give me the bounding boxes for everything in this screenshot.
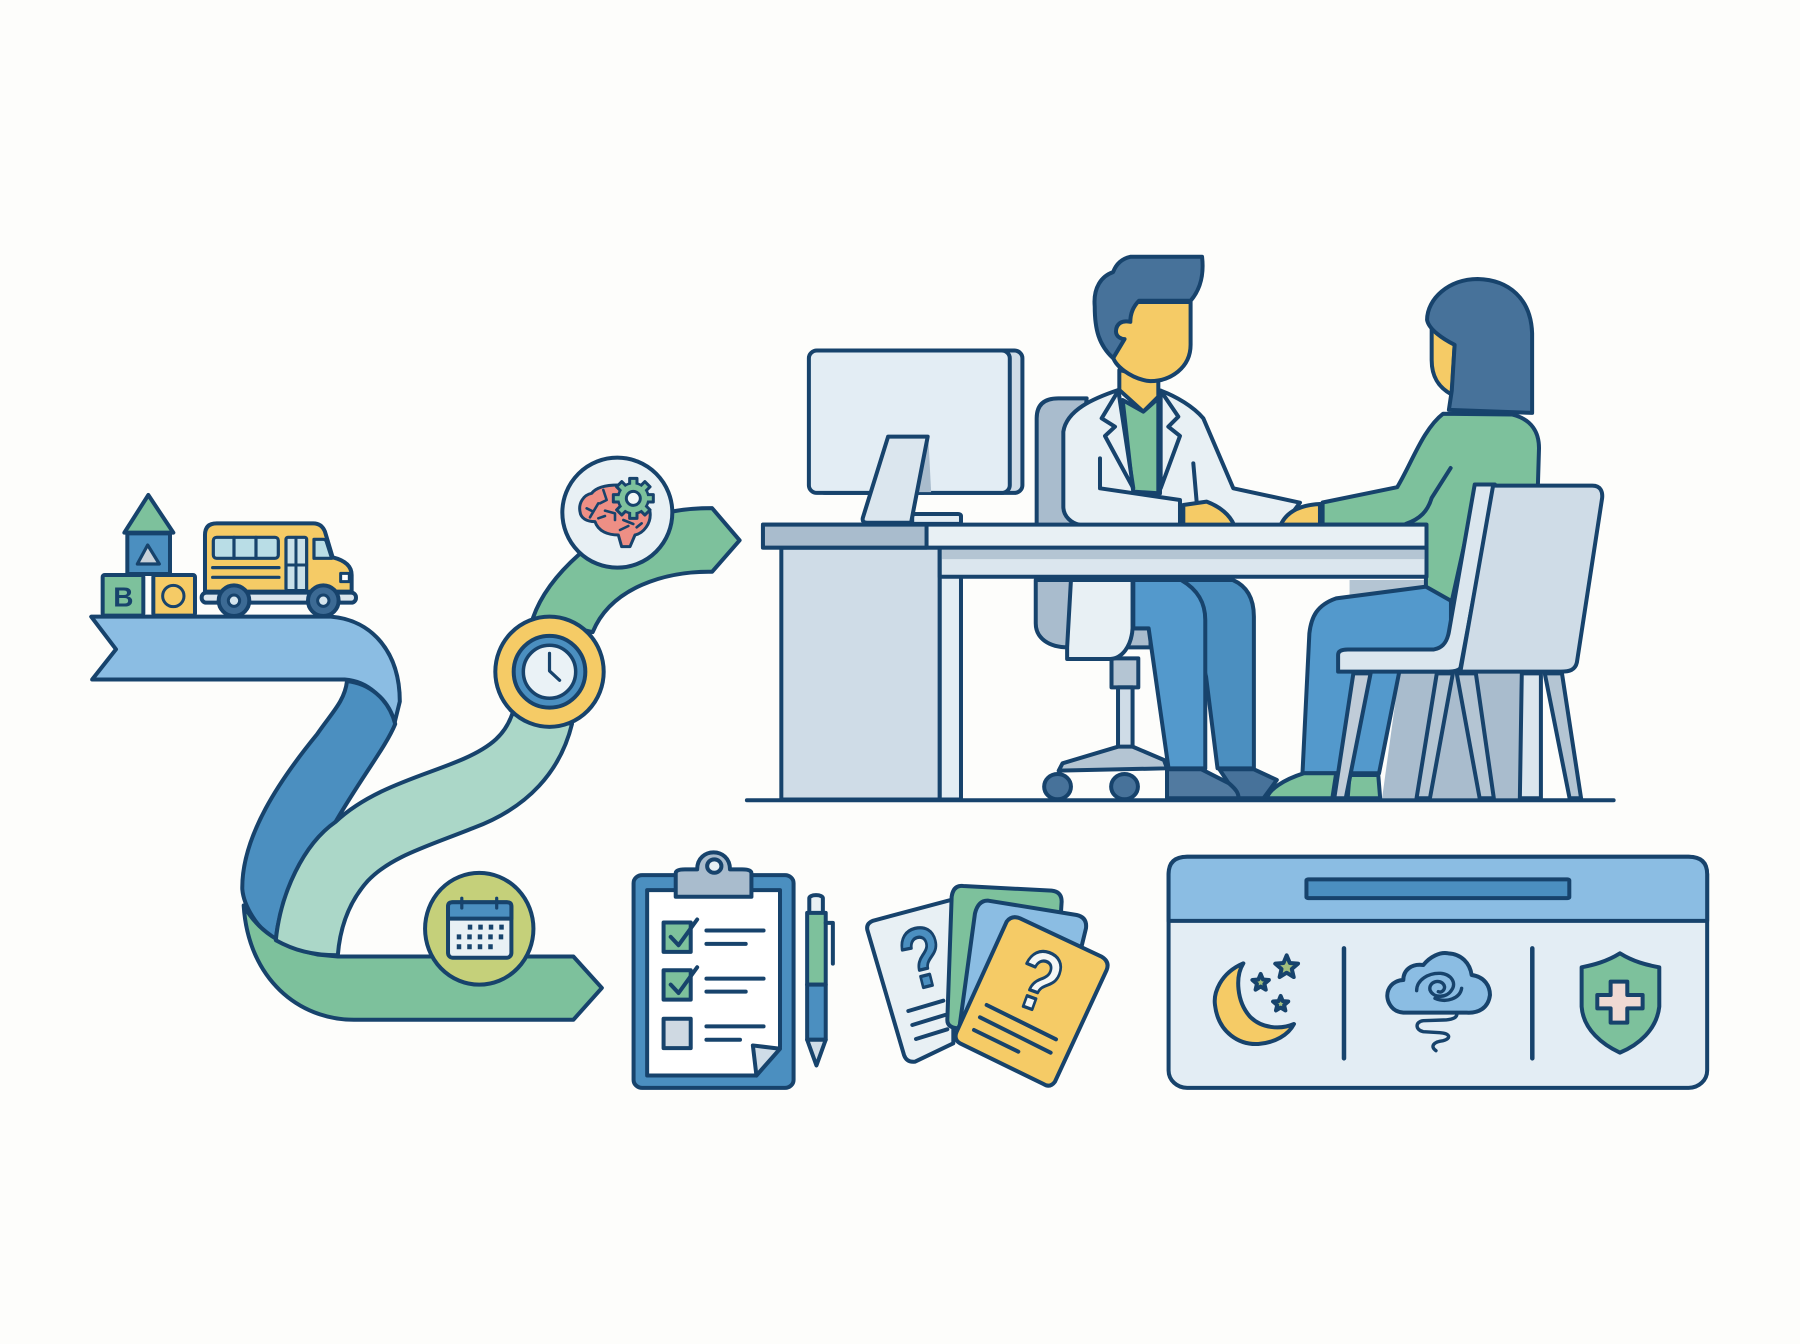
consultation scene (747, 257, 1614, 800)
patient's legs (1267, 580, 1520, 798)
under-desk legs and chairs (1036, 580, 1581, 799)
ribbon journey with milestones (91, 458, 740, 1020)
icon: storm cloud (1387, 953, 1490, 1051)
ribbon: dark blue fold (242, 681, 395, 939)
desk (763, 525, 1427, 799)
panel: sleep, stress, health frame (1169, 857, 1707, 1088)
patient's chair legs (1334, 673, 1581, 798)
bottom row icons (634, 852, 1707, 1088)
floor line (747, 798, 1614, 802)
ribbon path (91, 508, 740, 1020)
clipboard, pen and panel frame (634, 852, 1707, 1088)
icon: toy blocks: B (113, 582, 133, 613)
patient's torso (1323, 414, 1539, 601)
ribbon: top green arrow (533, 508, 740, 632)
desk, monitor, heads and patient's chair (747, 257, 1614, 800)
icon: question cards: ? (1003, 930, 1075, 1033)
doctor's hand (1183, 502, 1234, 525)
icon: brain and gear (562, 458, 672, 568)
panel dividers (1344, 948, 1532, 1058)
icon: pen (807, 895, 833, 1065)
icon: calendar (425, 873, 533, 985)
icon: health shield (1582, 953, 1659, 1053)
icon: clock (495, 617, 604, 727)
icon: question cards (867, 886, 1108, 1086)
toy blocks and school bus (103, 495, 356, 616)
panel icons (1215, 948, 1659, 1058)
doctor's chair base (1036, 580, 1167, 799)
ribbon: early childhood blue band (91, 617, 400, 724)
doctor's torso and chair back (1037, 370, 1320, 525)
icon: desktop monitor (809, 351, 1022, 524)
icon: toy blocks (103, 495, 195, 616)
doctor's legs (1067, 580, 1277, 798)
icon: school bus (202, 523, 356, 616)
ribbon: bottom green arrow (244, 906, 602, 1020)
doctor's head (1095, 257, 1203, 381)
icon: question cards: ? (891, 907, 954, 1009)
patient's chair (1338, 484, 1602, 672)
patient's head (1427, 279, 1532, 413)
icon: clipboard checklist (634, 852, 794, 1088)
ribbon: light green band (276, 714, 572, 955)
patient's hand (1281, 504, 1320, 525)
icon: moon and stars (1215, 955, 1298, 1044)
